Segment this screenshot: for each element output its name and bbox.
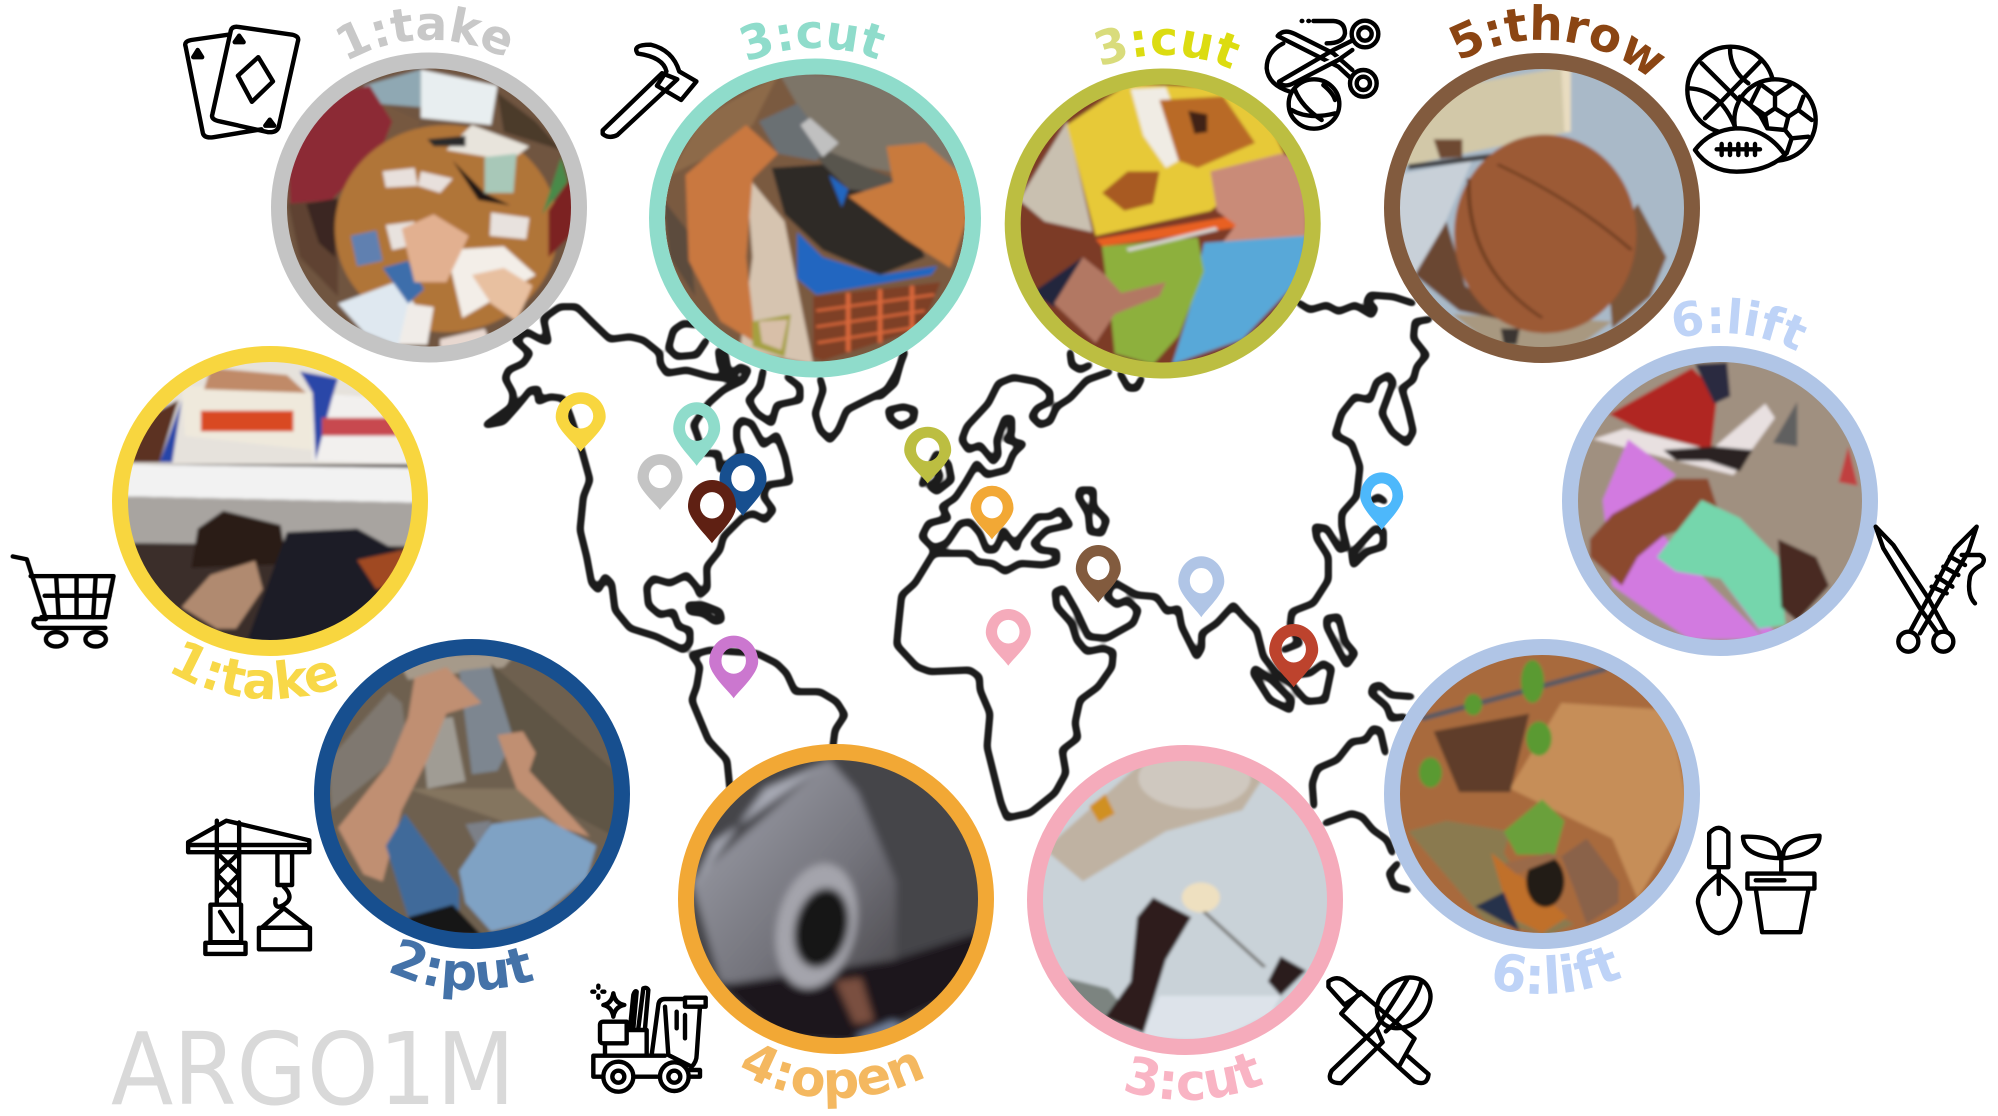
pin: dark blue — [720, 453, 766, 516]
pin: sky blue — [1360, 472, 1403, 530]
photo: placing stone slabs — [330, 655, 614, 933]
pin: red — [1269, 624, 1318, 687]
label: 3:cut pink: 3:cut — [1125, 1054, 1264, 1100]
panel: basketball circle — [1392, 61, 1692, 355]
icon: hammer — [603, 45, 696, 137]
pin: brown — [1076, 545, 1121, 603]
world map outline — [486, 295, 1430, 890]
ring: grey — [279, 60, 579, 354]
icon: playing cards — [185, 27, 298, 137]
photo: hands holding basketball — [1392, 64, 1692, 350]
label: 2:put blue: 2:put — [390, 939, 534, 1000]
pin: olive — [904, 427, 951, 483]
label: 1:take yellow: 1:take — [172, 641, 338, 700]
pin: maroon — [688, 480, 736, 543]
pin: purple — [709, 636, 758, 698]
ring: navy — [322, 647, 622, 941]
photo: opening a washing machine — [694, 760, 978, 1038]
panel: card game circle — [279, 60, 580, 354]
icon: scissors, mitt and ball — [1267, 21, 1378, 129]
label: 4:open orange: 4:open — [742, 1046, 924, 1109]
icon: construction crane — [188, 821, 310, 954]
ring: pink — [1035, 753, 1335, 1047]
label: 6:lift periwinkle top: 6:lift — [1674, 298, 1807, 351]
photo: candy bars on shelf — [128, 362, 412, 640]
map pins — [556, 392, 1403, 698]
ring: yellow — [120, 354, 420, 648]
photo: playing cards at table — [281, 64, 580, 350]
photo: rolling dough — [1043, 761, 1327, 1039]
pin: teal — [673, 402, 720, 466]
photo: lifting seedlings from soil — [1400, 655, 1684, 933]
label: 3:cut teal: 3:cut — [740, 22, 886, 60]
ring: olive — [1013, 76, 1313, 370]
pin: orange — [970, 486, 1014, 539]
panel: washing machine circle — [682, 752, 995, 1046]
pin: yellow — [556, 392, 606, 452]
ring: periwinkle — [1392, 647, 1692, 941]
icon: knitting needles — [1876, 527, 1984, 652]
pin: light blue — [1178, 556, 1224, 617]
pin: pink — [986, 609, 1031, 666]
panel: sewing book circle — [1013, 76, 1325, 371]
panel: planting seedlings circle — [1389, 647, 1695, 942]
ring: orange — [686, 752, 986, 1046]
photo: lifting green cloth — [1578, 362, 1862, 640]
ring: brown — [1392, 61, 1692, 355]
icon: shopping cart — [13, 556, 114, 646]
icon: rolling pin and whisk — [1328, 975, 1438, 1083]
panel: folding cloth circle — [1561, 354, 1880, 650]
ring: teal — [657, 66, 973, 370]
icon: cleaning machine — [592, 986, 706, 1092]
icon: sports balls — [1687, 47, 1816, 172]
icon: garden trowel and potted plant — [1698, 828, 1820, 933]
photo: tyre being repaired — [657, 71, 976, 368]
panel: laying bricks circle — [319, 647, 625, 942]
pin: grey — [638, 454, 682, 510]
ring: periwinkle — [1570, 354, 1870, 648]
panel: grinder and tyre circle — [657, 66, 976, 370]
panel: candy shelf circle — [120, 350, 440, 654]
photo: cutting a felt book — [1020, 84, 1305, 362]
label: 6:lift periwinkle bottom: 6:lift — [1494, 947, 1622, 994]
panel: dough rolling circle — [1032, 747, 1344, 1047]
label: 3:cut olive: 3:cut — [1094, 28, 1240, 69]
